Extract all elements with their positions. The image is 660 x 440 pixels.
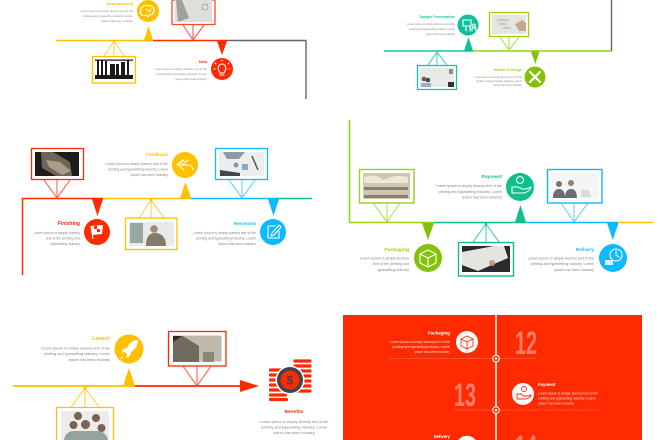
text: payment body: printing and typesetting industry. Lorem [538, 396, 596, 400]
marker: sketch and design [531, 52, 540, 64]
timeline arrow [13, 380, 259, 392]
photo frame: business card [458, 223, 514, 276]
heading: Delivery: Delivery [576, 247, 594, 252]
dashed dividers [389, 358, 601, 410]
text: feedback body: Lorem Ipsum is simply dummy text of the [106, 162, 168, 166]
marker: delivery [607, 223, 618, 240]
panel: top left timeline [56, 0, 306, 99]
icon: box [414, 244, 442, 272]
text: revisions body: printing and typesetting industry. Lorem [196, 236, 256, 240]
text: brainstorming body: Ipsum has been industry [102, 19, 134, 23]
marker: packaging [422, 223, 434, 240]
text: packaging body: Lorem Ipsum is simply dummy text of the [390, 340, 450, 344]
background [343, 315, 642, 440]
photo frame: books [360, 170, 414, 222]
marker: payment [515, 205, 526, 222]
text: sketch and design body: Lorem Ipsum is simply dummy text of the [474, 75, 523, 79]
text: sample presentation body: Lorem Ipsum is simply dummy text of the [407, 22, 456, 26]
photo frame: handshake [32, 148, 84, 198]
text: idea body: printing and typesetting industry. Lorem [157, 72, 208, 76]
timeline line [350, 120, 653, 222]
text: launch body: Lorem Ipsum is simply dummy text of the [41, 346, 110, 350]
text: brainstorming body: Lorem Ipsum is simply dummy text of the [80, 9, 133, 13]
icon: rocket [114, 334, 144, 364]
panel: middle left timeline [22, 148, 312, 275]
photo frame: business team [548, 170, 602, 222]
photo frame: silhouettes [92, 40, 136, 83]
text: packaging body: printing and typesetting industry. Lorem [393, 345, 450, 349]
text: payment body: Lorem Ipsum is simply dummy text of the [436, 184, 502, 188]
text: packaging body: Lorem Ipsum is simply dummy [360, 256, 409, 260]
icon: presentation [458, 14, 478, 36]
icon: benefits coins [270, 361, 310, 400]
text: delivery body: printing and typesetting industry. Lorem [531, 262, 594, 266]
heading: Revisions: Revisions [234, 221, 256, 226]
heading: Sample Presentation: Sample Presentation [419, 15, 455, 19]
heading: Finishing: Finishing [58, 221, 80, 227]
heading: Payment: Payment [482, 174, 502, 180]
panel: red timeline [343, 315, 642, 440]
icon: benefits coins: $ [287, 374, 294, 388]
text: idea body: Ipsum has been industry [176, 77, 208, 81]
node: 13 [493, 407, 499, 413]
icon: brain [137, 0, 159, 22]
text: launch body: printing and typesetting industry. Lorem [44, 352, 110, 356]
number 12: 12 [515, 325, 537, 361]
text: sketch and design body: Ipsum has been industry [493, 83, 523, 87]
text: revisions body: Ipsum has been industry [219, 242, 256, 246]
center line [495, 315, 497, 440]
heading: Brainstorming: Brainstorming [107, 2, 134, 6]
text: sketch and design body: printing and typesetting industry. Lorem [476, 79, 523, 83]
node: 12 [493, 355, 499, 362]
text: packaging body: text of the printing and [373, 262, 409, 266]
text: packaging body: typesetting industry [378, 268, 409, 272]
photo frame: drawing hand [490, 12, 528, 50]
text: payment body: printing and typesetting industry. Lorem [439, 190, 502, 194]
text: finishing body: text of the printing and [46, 236, 80, 240]
heading: Launch: Launch [92, 336, 110, 342]
text: revisions body: Lorem Ipsum is simply dummy text of the [194, 231, 256, 235]
text: launch body: Ipsum has been industry [69, 358, 110, 362]
icon: packaging box [456, 331, 478, 353]
icon: finishing flag [84, 219, 110, 245]
timeline line [22, 198, 312, 275]
marker: revisions [268, 199, 279, 216]
icon: payment hand [512, 383, 534, 405]
photo frame: businessman [126, 199, 177, 250]
heading: Packaging: Packaging [385, 247, 409, 253]
icon: tools [524, 66, 546, 88]
photo frame: students [418, 52, 456, 90]
photo frame: group of friends [56, 386, 114, 440]
text: benefits body: printing and typesetting industry. Lorem [261, 426, 327, 430]
text: brainstorming body: printing and typesetting industry. Lorem [83, 14, 134, 18]
heading: Payment: Payment [538, 382, 556, 387]
heading: Idea: Idea [199, 59, 208, 64]
icon: delivery [458, 436, 476, 440]
icon: revisions edit [260, 219, 286, 245]
heading: Sketch & Design: Sketch & Design [494, 68, 522, 72]
timeline line [56, 40, 306, 99]
marker: launch [123, 368, 135, 386]
text: sample presentation body: Ipsum has been industry [426, 32, 456, 36]
heading: Feedback: Feedback [146, 152, 168, 158]
text: payment body: Lorem Ipsum is simply dummy text of the [538, 392, 598, 396]
photo frame: sketch [172, 0, 215, 40]
text: finishing body: Lorem Ipsum is simply dummy [34, 231, 80, 235]
timeline line [384, 0, 612, 51]
text: feedback body: printing and typesetting industry. Lorem [108, 168, 168, 172]
panel: middle right timeline [350, 120, 653, 276]
marker: finishing [92, 199, 103, 216]
panel: top right timeline [384, 0, 612, 90]
marker: sample presentation [464, 37, 473, 51]
icon: lightbulb [211, 58, 233, 80]
number 13: 13 [454, 377, 476, 413]
text: payment body: Ipsum has been industry [462, 196, 502, 200]
photo frame: coins plant [168, 332, 226, 386]
icon: feedback arrows [172, 152, 198, 178]
heading: Delivery: Delivery [434, 434, 451, 439]
heading: Packaging: Packaging [428, 330, 450, 336]
text: benefits body: Lorem Ipsum is simply dummy text of the [260, 420, 328, 424]
text: delivery body: Lorem Ipsum is simply dummy text of the [528, 256, 594, 260]
text: idea body: Lorem Ipsum is simply dummy text of the [154, 67, 207, 71]
text: sample presentation body: printing and typesetting industry. Lorem [409, 27, 456, 31]
text: feedback body: Ipsum has been industry [131, 173, 168, 177]
text: delivery body: Ipsum has been industry [554, 268, 594, 272]
marker: idea [217, 41, 227, 55]
panel: bottom left timeline [13, 332, 328, 440]
text: packaging body: Ipsum has been industry [414, 350, 450, 354]
marker: feedback [180, 182, 191, 198]
photo frame: charts [216, 148, 268, 198]
text: benefits body: Ipsum has been industry [273, 431, 315, 435]
marker: brainstorming [144, 26, 153, 40]
text: finishing body: typesetting industry [50, 242, 80, 246]
icon: payment hand [506, 173, 534, 201]
text: payment body: Ipsum has been industry [538, 402, 574, 406]
icon: delivery clock [599, 244, 627, 272]
heading: Benefits: Benefits [285, 409, 304, 415]
